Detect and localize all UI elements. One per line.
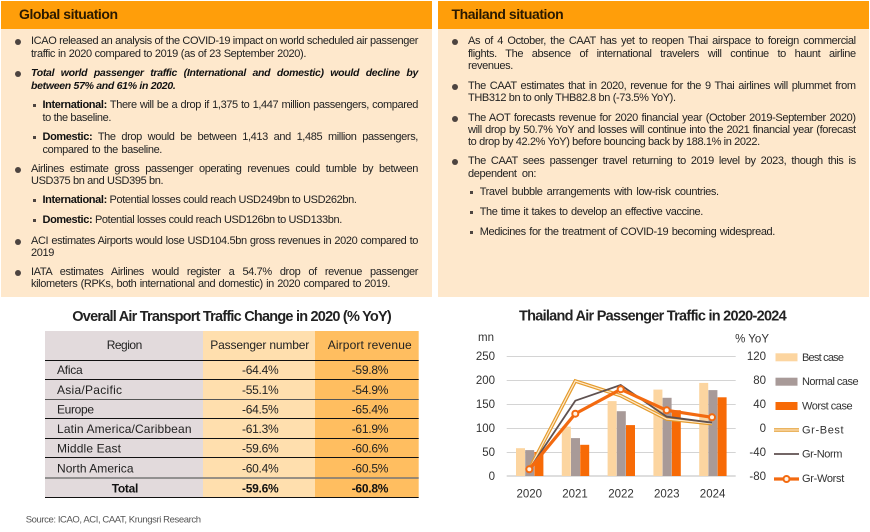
bars: worst case	[534, 397, 727, 476]
text: total world traffic decline: Total world passenger traffic (International and domestic) would decline by	[31, 67, 418, 79]
chart title: Thailand Air Passenger Traffic in 2020-2024	[519, 309, 787, 325]
table title: Overall Air Transport Traffic Change in 2020 (% YoY)	[72, 309, 392, 325]
right axis labels: % YoY	[735, 334, 769, 346]
text: CAAT airspace: revenues.	[468, 60, 513, 72]
text: vaccine: The time it takes to develop an effective vaccine.	[480, 206, 703, 218]
text: international losses: International: Potential losses could reach USD249bn to USD262bn.	[42, 194, 357, 206]
heading: global situation: Global situation	[19, 6, 118, 22]
text: AOT forecast: will drop by 50.7% YoY and losses will continue into the 2021 financial year (forecast	[468, 124, 856, 136]
table header row: Region	[107, 338, 142, 352]
text: ICAO analysis	[15, 35, 418, 60]
table row: Middle East: -59.6%	[242, 442, 279, 456]
left axis labels: mn	[478, 332, 494, 344]
table header row	[107, 338, 412, 352]
table row: Africa: -64.4%	[242, 363, 279, 377]
text: CAAT revenue estimate: The CAAT estimates that in 2020, revenue for the 9 Thai airlines will plummet from	[468, 80, 856, 92]
text: ICAO analysis: ICAO released an analysis of the COVID-19 impact on world scheduled air passenger	[31, 35, 418, 47]
text: CAAT passenger recovery: The CAAT sees passenger travel returning to 2019 level by 2023, though this is	[468, 155, 856, 167]
x axis labels: 2023	[654, 488, 680, 500]
table row: Total: -60.8%	[352, 482, 389, 496]
legend: Gr-Best: Gr-Best	[802, 425, 844, 437]
text: medicines: Medicines for the treatment of COVID-19 becoming widespread.	[480, 226, 775, 238]
right axis labels: 80	[753, 375, 766, 387]
text: CAAT airspace	[452, 35, 856, 72]
text: domestic losses: Domestic: Potential losses could reach USD126bn to USD133bn.	[42, 214, 342, 226]
text: CAAT revenue estimate: THB312 bn to only THB82.8 bn (-73.5% YoY).	[468, 92, 676, 104]
text: domestic drop: Domestic: The drop would be between 1,413 and 1,485 million passengers,	[42, 131, 418, 143]
legend: best case: Best case	[802, 352, 844, 364]
panel: Thailand situation	[438, 1, 869, 297]
text: total world traffic decline	[15, 67, 419, 92]
table row: Europe: -64.5%	[242, 403, 279, 417]
table header row: Passenger number	[210, 338, 309, 352]
legend: Gr-Norm: Gr-Norm	[802, 449, 842, 461]
text: total world traffic decline: between 57% and 61% in 2020.	[31, 80, 176, 92]
text: AOT forecast	[452, 112, 856, 148]
text: travel bubble: Travel bubble arrangements with low-risk countries.	[480, 186, 719, 198]
left axis labels: 50	[482, 447, 495, 459]
text: CAAT revenue estimate	[452, 80, 856, 104]
table row: Latin America/Caribbean: -61.3%	[242, 422, 279, 436]
table row: Total: Total	[112, 482, 138, 496]
panel: global situation	[1, 1, 432, 297]
left axis labels: 100	[476, 423, 495, 435]
x axis labels: 2020	[517, 488, 542, 500]
text: international drop: International: There will be a drop if 1,375 to 1,447 million passengers, compared	[42, 99, 418, 111]
right axis labels: 120	[747, 351, 766, 363]
right axis labels: -80	[749, 471, 766, 483]
text: CAAT passenger recovery: dependent on:	[468, 168, 536, 180]
left axis labels: 150	[476, 399, 495, 411]
table row: Africa: -59.8%	[352, 363, 389, 377]
text: IATA estimate	[15, 266, 418, 290]
x axis labels: 2021	[562, 488, 588, 500]
line: Gr-Best	[529, 381, 712, 469]
text: airline revenues	[15, 163, 418, 187]
table row: Latin America/Caribbean: -61.9%	[352, 422, 389, 436]
line: Gr-Norm	[529, 385, 712, 469]
x axis labels	[517, 488, 726, 500]
table header row: Airport revenue	[328, 338, 412, 352]
text: ACI estimate: ACI estimates Airports would lose USD104.5bn gross revenues in 2020 compared to	[31, 235, 418, 247]
x axis labels: 2022	[608, 488, 634, 500]
text: ICAO analysis: traffic in 2020 compared to 2019 (as of 23 September 2020).	[31, 48, 306, 60]
table row: Total: -59.6%	[242, 482, 279, 496]
text: domestic drop	[33, 131, 418, 156]
legend: normal case: Normal case	[802, 376, 859, 388]
text: airline revenues: Airlines estimate gross passenger operating revenues could tumble by between	[31, 163, 418, 175]
text: ACI estimate	[15, 235, 418, 259]
text: AOT forecast: The AOT forecasts revenue for 2020 financial year (October 2019-September 2020)	[468, 112, 856, 124]
right axis labels: 0	[760, 423, 766, 435]
heading: Thailand situation	[438, 1, 869, 29]
left axis labels: 0	[489, 471, 495, 483]
text: AOT forecast: to drop by 42.2% YoY) before bouncing back by 188.1% in 2022.	[468, 136, 760, 148]
table row: North America: -60.4%	[242, 462, 279, 476]
legend: worst case: Worst case	[802, 400, 853, 412]
table row: Europe: -65.4%	[352, 403, 389, 417]
left axis labels	[476, 332, 495, 483]
table row: Europe: Europe	[57, 403, 94, 417]
table row: Middle East	[57, 442, 389, 456]
legend	[774, 352, 859, 485]
bars: normal case	[525, 390, 717, 476]
heading: Thailand situation: Thailand situation	[452, 6, 563, 22]
table row: North America: -60.5%	[352, 462, 389, 476]
text: CAAT passenger recovery	[452, 155, 856, 180]
table row: Latin America/Caribbean: Latin America/Caribbean	[57, 422, 192, 436]
text: IATA estimate: IATA estimates Airlines would register a 54.7% drop of revenue passenger	[31, 266, 418, 278]
table row: Total	[112, 482, 389, 496]
text: CAAT airspace: As of 4 October, the CAAT has yet to reopen Thai airspace to foreign commercial	[468, 35, 856, 47]
panel: Thailand passenger chart	[476, 309, 859, 500]
table row: Middle East: -60.6%	[352, 442, 389, 456]
source note: Source: ICAO, ACI, CAAT, Krungsri Research	[26, 515, 201, 526]
right axis labels	[735, 334, 769, 483]
panel: traffic change table	[26, 309, 419, 526]
table backgrounds	[45, 331, 419, 498]
table row: Middle East: Middle East	[57, 442, 122, 456]
table row: Africa: Afica	[57, 363, 83, 377]
text: CAAT airspace: flights. The absence of international travelers will continue to haunt airline	[468, 48, 856, 60]
heading: global situation	[1, 1, 432, 29]
text: IATA estimate: kilometers (RPKs, both international and domestic) in 2020 compared to 2019.	[31, 278, 390, 290]
table row: Asia/Pacific: Asia/Pacific	[57, 383, 122, 397]
text: international drop: to the baseline.	[42, 112, 111, 124]
table row: Latin America/Caribbean	[57, 422, 389, 436]
line: Gr-Worst	[526, 386, 715, 472]
left axis labels: 200	[476, 375, 495, 387]
left axis labels: 250	[476, 351, 495, 363]
text: ACI estimate: 2019	[31, 247, 54, 259]
table row: Europe	[57, 403, 389, 417]
right axis labels: -40	[749, 447, 766, 459]
x axis labels: 2024	[700, 488, 726, 500]
table row: North America: North America	[57, 462, 134, 476]
table row: Asia/Pacific: -55.1%	[242, 383, 279, 397]
text: airline revenues: USD375 bn and USD395 bn.	[31, 175, 163, 187]
bars: best case	[516, 383, 708, 476]
table row: Africa	[57, 363, 389, 377]
table row: North America	[57, 462, 389, 476]
right axis labels: 40	[753, 399, 766, 411]
table row: Asia/Pacific	[57, 383, 389, 397]
text: international drop	[33, 99, 418, 124]
legend: Gr-Worst: Gr-Worst	[802, 473, 844, 485]
table row: Asia/Pacific: -54.9%	[352, 383, 389, 397]
text: domestic drop: compared to the baseline.	[42, 144, 162, 156]
